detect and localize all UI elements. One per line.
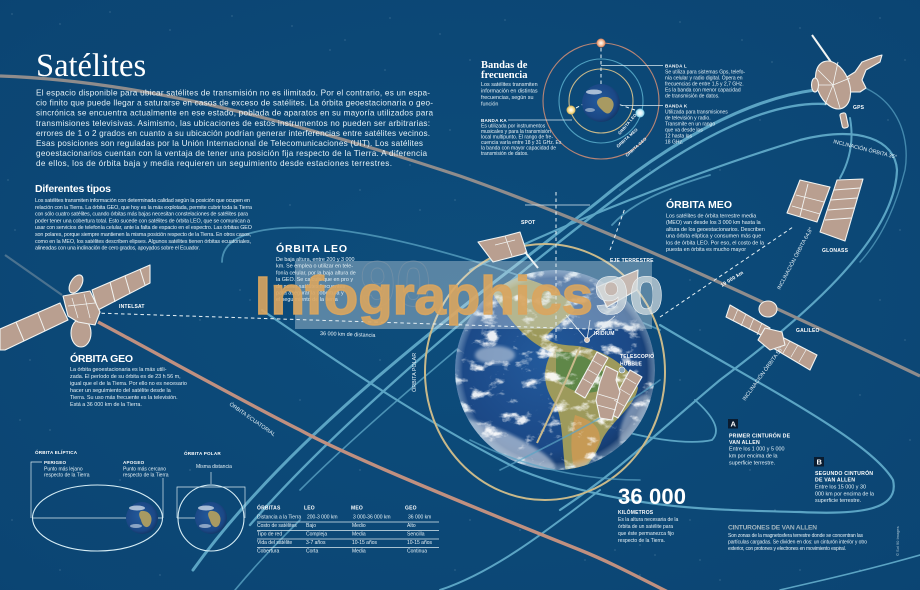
text: banda ka: BANDA KA — [481, 118, 507, 123]
earth — [455, 270, 655, 470]
panel: órbita polar — [177, 449, 245, 551]
callout: segundo cinturón — [814, 457, 874, 504]
text: banda k: Utilizada para transmisiones — [665, 110, 728, 116]
watermark: 90 — [360, 248, 431, 320]
callout: segundo cinturón: DE VAN ALLEN — [815, 478, 855, 484]
text: banda k: BANDA K — [665, 104, 688, 108]
panel: órbita elíptica: respecto de la Tierra — [44, 472, 90, 478]
intro text: cio finito que puede llegar a saturarse en casos de exceso de satélites. La órbita geoestacionaria o geo- — [36, 99, 433, 108]
table: comparación de órbitas: ÓRBITAS — [257, 504, 281, 512]
panel: órbita LEO: De baja altura, entre 200 y 3 000 — [276, 257, 355, 263]
panel: órbita elíptica: Punto más cercano — [123, 466, 166, 472]
text: banda k: 12 hasta los — [665, 134, 692, 140]
callout: 36 000 kilómetros: Es la altura necesaria de la — [618, 517, 679, 523]
orbit lines — [193, 85, 920, 590]
text: diferentes tipos: usar con servicios de telefonía celular, ante la falta de espacio en el espectro. Las órbitas GEO — [35, 225, 252, 231]
label: órbita polar: ÓRBITA POLAR — [411, 353, 418, 392]
callout: primer cinturón: superficie terrestre. — [729, 460, 775, 466]
callout: segundo cinturón: B — [816, 458, 822, 466]
satellite: Hubble — [575, 352, 654, 420]
satellite: GPS: GPS — [853, 105, 865, 111]
text: cinturones de van allen: CINTURONES DE VAN ALLEN — [728, 524, 817, 532]
callout: segundo cinturón: 000 km por encima de la — [815, 492, 874, 498]
panel: órbita GEO: Está a 36 000 km de la Tierra. — [70, 402, 142, 408]
text: bandas intro: frecuencias, según su — [481, 95, 533, 101]
panel: órbita LEO: km. Se emplea o utilizar en tele- — [276, 264, 353, 270]
table: comparación de órbitas: Media — [352, 532, 366, 538]
polar orbit ring — [425, 244, 665, 500]
label: 36 000 km de distancia: 36 000 km de distancia — [320, 331, 376, 339]
panel: órbita GEO: ÓRBITA GEO — [70, 352, 133, 365]
text: bandas intro: Los satélites transmiten — [481, 82, 538, 88]
text: banda ka: transmisión de datos. — [481, 151, 529, 157]
callout: segundo cinturón: SEGUNDO CINTURÓN — [815, 469, 873, 477]
text: banda ka: local multipunto. El rango de fre- — [481, 134, 553, 140]
heading: bandas de frecuencia: frecuencia — [481, 70, 528, 81]
panel: órbita LEO: la GEO. Se calcula que en pro y — [276, 277, 353, 283]
panel: órbita LEO: ÓRBITA LEO — [276, 242, 347, 255]
satellite: Spot: SPOT — [521, 220, 535, 226]
intro text: sincrónica se encuentra actualmente en ese estado, poblada de aparatos en su mayoría utilizados para — [36, 109, 433, 118]
panel: órbita GEO: igual que el de la Tierra. Por ello no es necesario — [70, 381, 187, 387]
panel: órbita LEO: el seguimiento de la tierra — [276, 297, 338, 303]
satellite: Intelsat — [0, 265, 150, 350]
callout: primer cinturón: km por encima de la — [729, 454, 778, 460]
watermark: Infographics — [255, 266, 593, 326]
panel: órbita GEO — [70, 352, 187, 408]
table: comparación de órbitas: 36 000 km — [408, 514, 431, 520]
text: cinturones de van allen: exterior, con protones y electrones en movimiento espiral. — [728, 546, 846, 552]
text: banda ka: Es utilizada por instrumentos — [481, 124, 546, 130]
dashed line to Glonass — [660, 227, 793, 317]
label: inclinación 56: INCLINACIÓN ÓRBITA 56° — [741, 345, 785, 402]
table: comparación de órbitas: 3 000-36 000 km — [353, 514, 391, 520]
credit: © Sol 90 Images — [895, 526, 900, 556]
heading: bandas de frecuencia: Bandas de — [481, 60, 528, 71]
table: comparación de órbitas: 10-15 años — [352, 540, 378, 546]
panel: órbita LEO: para asegurar la cobertura y — [276, 290, 344, 296]
text: diferentes tipos: Los satélites transmiten información con determinada calidad según la posición que ocupen en — [35, 198, 250, 204]
callout: segundo cinturón: Entre los 15 000 y 30 — [815, 484, 866, 490]
text: banda l — [601, 64, 745, 100]
panel: órbita elíptica: respecto de la Tierra — [123, 472, 169, 478]
earth axis — [525, 192, 625, 340]
panel: órbita GEO: Tierra. Su uso más frecuente es la televisión. — [70, 395, 178, 401]
callout: segundo cinturón: superficie terrestre. — [815, 498, 861, 504]
panel: órbita polar: ÓRBITA POLAR — [184, 449, 221, 456]
callout: 36 000 kilómetros — [618, 484, 686, 544]
watermark — [255, 248, 664, 329]
mini earth: elíptica — [126, 502, 158, 534]
panel: órbita GEO: La órbita geoestacionaria es la más utili- — [70, 367, 167, 373]
callout: 36 000 kilómetros: KILÓMETROS — [618, 508, 654, 516]
text: banda ka: musicales y para la transmisión — [481, 129, 551, 135]
text: cinturones de van allen: partículas cargadas. Se dividen en dos: un cinturón interior y otro — [728, 540, 867, 546]
satellite: GPS — [809, 35, 882, 128]
table: comparación de órbitas: Alto — [407, 523, 416, 529]
panel: órbita elíptica — [31, 448, 169, 551]
table: comparación de órbitas: 10-15 años — [407, 540, 433, 546]
text: banda l: Se utiliza para sistemas Gps, telefo- — [665, 70, 745, 76]
callout: primer cinturón — [728, 419, 791, 466]
callout: primer cinturón: VAN ALLEN — [729, 440, 760, 446]
table: comparación de órbitas: Costo de satélites — [257, 523, 297, 529]
text: banda k — [622, 104, 728, 146]
table: comparación de órbitas: Sencilla — [407, 532, 425, 538]
panel: bandas de frecuencia diagram — [543, 38, 659, 159]
panel: bandas de frecuencia diagram: ÓRBITA MEO — [615, 127, 639, 149]
intro text: El espacio disponible para ubicar satélites de transmisión no es ilimitado. Por el contrario, es un espa- — [36, 88, 430, 98]
table: comparación de órbitas: Vida del satélite — [257, 540, 292, 546]
table: comparación de órbitas: 200-3 000 km — [307, 514, 338, 520]
panel: órbita GEO: zada. El período de su órbita es de 23 h 56 m, — [70, 374, 181, 380]
intro text: geoestacionarios cuentan con la ventaja de tener una posición fija respecto de la Tierra. A diferencia — [36, 149, 427, 158]
text: diferentes tipos: son polares, porque siempre mantienen la misma posición respecto de la Tierra. En otros casos, — [35, 232, 252, 238]
panel: órbita MEO — [666, 198, 765, 253]
panel: órbita MEO: ÓRBITA MEO — [666, 198, 732, 211]
text: banda ka: cuencia varía entre 18 y 31 GHz. Es — [481, 140, 562, 146]
mini earth: polar — [195, 502, 227, 534]
callout: 36 000 kilómetros: que éste permanezca fijo — [618, 531, 674, 537]
table: comparación de órbitas: GEO — [405, 506, 417, 512]
panel: órbita MEO: una órbita elíptica y consumen más que — [666, 234, 761, 240]
table: comparación de órbitas: Tipo de red — [257, 532, 282, 538]
satellite: Spot — [478, 220, 538, 268]
heading: diferentes tipos: Diferentes tipos — [35, 183, 111, 195]
callout: primer cinturón: A — [730, 420, 736, 428]
title: Satélites — [36, 48, 146, 84]
intro text: Esas posiciones son reguladas por la Unión Internacional de Telecomunicaciones (UIT). Los satélites — [36, 139, 423, 148]
table: comparación de órbitas: Medio — [352, 523, 366, 529]
table: comparación de órbitas: Bajo — [306, 523, 316, 529]
text: banda k: 18 GHz. — [665, 140, 683, 146]
orbit lines over earth — [470, 347, 660, 480]
panel: órbita LEO: fonía celular, por la baja altura de — [276, 270, 356, 276]
text: banda l: de transmisión de datos. — [665, 94, 719, 100]
text: bandas intro: información en distintas — [481, 88, 538, 94]
text: banda k: que va desde los — [665, 128, 703, 134]
table: comparación de órbitas: MEO — [351, 506, 363, 512]
table: comparación de órbitas: Media — [352, 548, 366, 554]
mini earth — [582, 84, 620, 122]
panel: órbita MEO: (MEO) van desde los 3 000 km hasta la — [666, 220, 761, 226]
panel: órbita elíptica: APOGEO — [123, 460, 145, 465]
panel: órbita MEO: altura de los geoestacionarios. Describen — [666, 227, 765, 233]
table: comparación de órbitas: Corta — [306, 548, 318, 554]
text: cinturones de van allen: Son zonas de la magnetosfera terrestre donde se concentran las — [728, 533, 864, 539]
table: comparación de órbitas: 3-7 años — [306, 540, 326, 546]
satellite: Galileo — [726, 301, 820, 370]
text: banda l: frecuencias de entre 1,5 y 2,7 GHz. — [665, 82, 744, 88]
satellite: Intelsat: INTELSAT — [119, 304, 145, 310]
text: diferentes tipos: con sólo cuatro satélites, cuando órbitas más bajas necesitan constelaciones de satélites para — [35, 212, 248, 218]
panel: órbita LEO: de poner satélites frecuentes — [276, 284, 346, 290]
text: diferentes tipos: poder tener una cobertura total. Esto sucede con satélites de órbita LEO, que se comunican a — [35, 218, 250, 224]
text: banda k: Transmite en un rango — [665, 122, 715, 128]
label: inclinación 35: INCLINACIÓN ÓRBITA 35° — [833, 138, 898, 161]
panel: bandas de frecuencia diagram: ÓRBITA GEO — [624, 136, 648, 158]
panel: órbita MEO: Los satélites de órbita terrestre media — [666, 214, 756, 220]
watermark: 90 — [594, 266, 664, 326]
panel: órbita GEO: hacer un seguimiento del satélite desde la — [70, 388, 171, 394]
label: inclinación 64,8: INCLINACIÓN ÓRBITA 64,8° — [776, 226, 815, 291]
text: banda l: nía celular y radio digital. Opera en — [665, 76, 743, 82]
label: eje terrestre: EJE TERRESTRE — [610, 258, 654, 264]
table: comparación de órbitas: Continua — [407, 548, 427, 554]
text: banda l: BANDA L — [665, 64, 687, 68]
text: diferentes tipos: como en la MEO, los satélites describen elipses. Algunos satélites tienen órbitas ecuatoriales, — [35, 239, 252, 245]
text: banda ka — [481, 118, 572, 157]
panel: órbita MEO: puesta en órbita es mucho mayor — [666, 247, 746, 253]
callout: 36 000 kilómetros: órbita de un satélite para — [618, 524, 673, 530]
satellite: Iridium: IRIDIUM — [594, 331, 615, 337]
dashed distance line — [95, 313, 620, 330]
satellite: Iridium — [566, 270, 638, 343]
table: comparación de órbitas: Cobertura — [257, 548, 279, 554]
label: 19 000 km: 19 000 km — [720, 270, 745, 289]
satellite: Hubble: TELESCOPIO — [620, 354, 654, 360]
panel: órbita polar: Misma distancia — [196, 464, 232, 470]
callout: primer cinturón: Entre los 1 000 y 5 000 — [729, 446, 784, 452]
label: órbita ecuatorial: ÓRBITA ECUATORIAL — [228, 401, 277, 438]
satellite: Glonass: GLONASS — [822, 248, 849, 254]
intro text: errores de 1 o 2 grados en cuanto a su ubicación podrían generar interferencias entre satélites vecinos. — [36, 129, 430, 138]
table: comparación de órbitas: Distancia a la Tierra — [257, 514, 301, 520]
intro text: de ellos, los de órbita baja y media requieren un seguimiento desde estaciones terrestres. — [36, 159, 392, 168]
panel: órbita elíptica: PERIGEO — [44, 460, 67, 465]
panel: órbita elíptica: Punto más lejano — [44, 466, 83, 472]
satellite: Galileo: GALILEO — [796, 328, 820, 334]
text: diferentes tipos: alineadas con una inclinación de cero grados, apoyados sobre el Ecuador. — [35, 246, 200, 252]
satellite: Glonass — [787, 179, 863, 254]
intro text: transmisiones televisivas. Asimismo, las ubicaciones de estos instrumentos no pueden ser arbitrarias: — [36, 119, 430, 128]
text: banda l: Es la banda con menor capacidad — [665, 88, 741, 94]
panel: bandas de frecuencia diagram: ÓRBITA LEO — [617, 112, 638, 136]
table: comparación de órbitas: LEO — [304, 506, 315, 512]
table: comparación de órbitas — [257, 504, 439, 554]
callout: primer cinturón: PRIMER CINTURÓN DE — [729, 432, 791, 440]
panel: órbita MEO: los de órbita LEO. Por eso, el costo de la — [666, 240, 764, 246]
panel: órbita elíptica: ÓRBITA ELÍPTICA — [35, 448, 78, 455]
table: comparación de órbitas: Compleja — [306, 532, 327, 538]
text: cinturones de van allen — [728, 524, 867, 552]
text: diferentes tipos: relación con la Tierra. La órbita GEO, que hoy es la más explotada, permite cubrir toda la Tierra — [35, 205, 252, 211]
callout: 36 000 kilómetros: 36 000 — [618, 484, 686, 509]
satellite: Hubble: HUBBLE — [620, 362, 642, 368]
text: banda k: de televisión y radio. — [665, 116, 711, 122]
panel: órbita LEO — [276, 242, 356, 303]
text: banda ka: la banda con mayor capacidad de — [481, 146, 556, 152]
callout: 36 000 kilómetros: respecto de la Tierra. — [618, 538, 665, 544]
text: bandas intro: función — [481, 102, 498, 108]
